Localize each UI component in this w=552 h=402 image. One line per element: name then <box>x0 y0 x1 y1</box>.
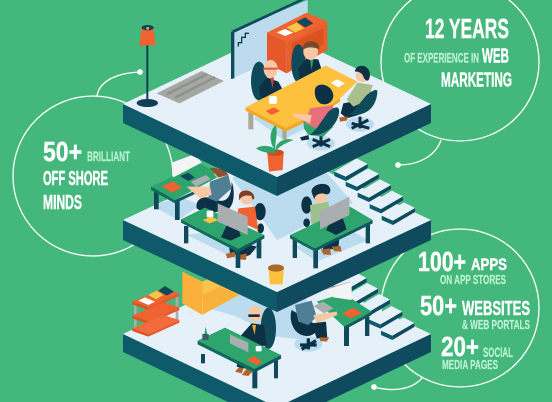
floor lamp <box>137 25 158 107</box>
callout circle: bottom right <box>372 229 539 390</box>
text: apps, websites and social media: 100+ <box>418 246 466 277</box>
cabinet <box>267 13 327 73</box>
top floor furniture <box>137 0 377 172</box>
person: man in green shirt <box>339 66 377 132</box>
text: 50+ brilliant off shore minds: MINDS <box>43 192 82 214</box>
person: manager at desk <box>235 306 276 376</box>
whiteboard wall <box>231 0 308 79</box>
desk: manager <box>198 327 281 388</box>
text: 12 years of experience in web marketing: WEB <box>482 46 509 68</box>
callout circle: left <box>13 70 173 256</box>
text: 50+ brilliant off shore minds: 50+ <box>43 136 82 167</box>
person: bald man <box>251 60 283 101</box>
trash can <box>268 264 284 284</box>
middle floor furniture <box>151 154 415 284</box>
bottom floor furniture <box>132 272 414 388</box>
person: seated from behind <box>291 301 337 352</box>
rug <box>157 71 224 103</box>
meeting table <box>246 66 357 139</box>
top floor <box>123 31 431 196</box>
text: apps, websites and social media: ON APP STORES <box>440 273 506 287</box>
desk: rear with monitor <box>313 282 372 346</box>
shelf <box>132 286 179 337</box>
text: 50+ brilliant off shore minds: BRILLIANT <box>87 148 130 164</box>
text: 12 years of experience in web marketing <box>404 13 512 92</box>
desk: left with monitor <box>151 154 234 220</box>
text: 12 years of experience in web marketing: OF EXPERIENCE IN <box>404 50 479 66</box>
desk and worker: centre <box>181 190 266 268</box>
callout circle: top right <box>381 0 539 167</box>
person: man with brown hair <box>291 41 322 83</box>
middle floor <box>123 148 431 312</box>
sofa <box>182 272 240 315</box>
text: apps, websites and social media: 20+ <box>441 331 479 362</box>
text: 50+ brilliant off shore minds: OFF SHORE <box>43 168 108 190</box>
stairs: lower flight <box>333 272 414 340</box>
stairs: upper flight <box>334 158 415 225</box>
bottom floor <box>123 262 431 402</box>
text: apps, websites and social media: APPS <box>471 255 507 274</box>
desk and worker: right <box>290 184 373 268</box>
potted plant <box>256 125 293 172</box>
text: 50+ brilliant off shore minds <box>43 136 130 214</box>
person: woman in pink <box>293 85 339 151</box>
text: apps, websites and social media: SOCIAL <box>483 344 513 360</box>
text: apps, websites and social media: MEDIA PAGES <box>442 358 498 372</box>
text: apps, websites and social media: 50+ <box>420 290 457 321</box>
text: apps, websites and social media <box>418 246 530 372</box>
